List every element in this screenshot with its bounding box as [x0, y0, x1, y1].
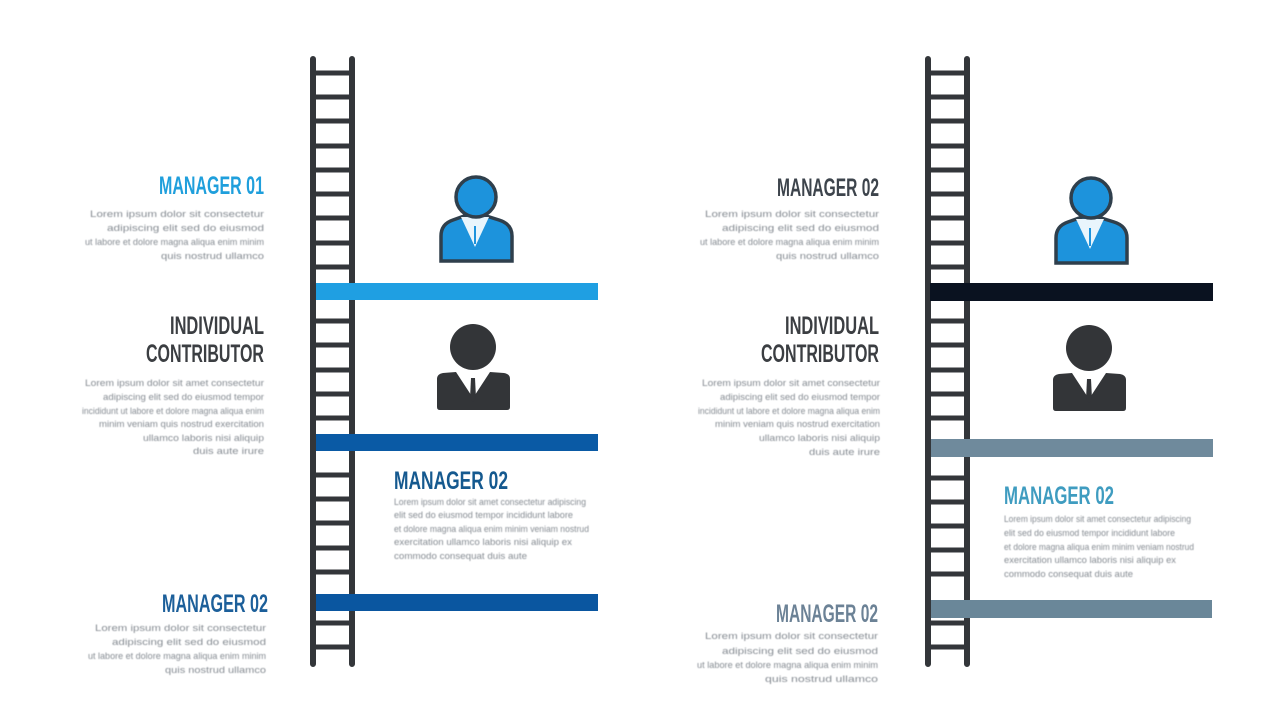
- text: manager 02 centre: et dolore magna aliqua enim minim veniam nostrud: [394, 524, 589, 535]
- text: individual contributor right: duis aute irure: [809, 447, 880, 458]
- bar: dark blue rung: [316, 594, 598, 611]
- text: manager 02 bottom right: Lorem ipsum dolor sit consectetur: [705, 631, 878, 642]
- text: individual contributor: adipiscing elit sed do eiusmod tempor: [103, 392, 264, 403]
- text: individual contributor right: incididunt ut labore et dolore magna aliqua enim: [698, 406, 880, 417]
- bar: light blue rung: [316, 283, 598, 300]
- text: manager 02 centre: commodo consequat duis aute: [394, 551, 527, 562]
- text: manager 02 centre right: MANAGER 02: [1004, 482, 1114, 510]
- text: manager 02 bottom right: adipiscing elit sed do eiusmod: [722, 646, 878, 657]
- panel: left career ladder: [82, 59, 598, 676]
- text: manager 02 centre: Lorem ipsum dolor sit amet consectetur adipiscing: [394, 497, 586, 508]
- text: individual contributor right: minim veniam quis nostrud exercitation: [715, 419, 880, 430]
- text: individual contributor: ullamco laboris nisi aliquip: [143, 433, 264, 444]
- text: manager 01: ut labore et dolore magna aliqua enim minim: [85, 237, 264, 248]
- bar: slate rung upper: [931, 439, 1213, 457]
- text: manager 02 bottom right: ut labore et dolore magna aliqua enim minim: [697, 660, 878, 671]
- text: individual contributor right: CONTRIBUTOR: [761, 340, 879, 368]
- text: manager 02 centre right: exercitation ullamco laboris nisi aliquip ex: [1004, 555, 1176, 566]
- icon: blue manager right: [1056, 178, 1127, 263]
- text: manager 02 top right: MANAGER 02: [777, 174, 879, 202]
- text: individual contributor: Lorem ipsum dolor sit amet consectetur: [85, 378, 264, 389]
- text: manager 01: MANAGER 01: [159, 172, 264, 200]
- panel: right career ladder: [697, 59, 1213, 685]
- text: individual contributor: incididunt ut labore et dolore magna aliqua enim: [82, 406, 264, 417]
- ladder: left: [313, 59, 352, 664]
- text: manager 01: [85, 172, 264, 262]
- text: manager 02 centre right: [1004, 482, 1194, 580]
- icon: dark contributor right: [1053, 325, 1126, 411]
- icon: dark contributor: [437, 324, 510, 410]
- text: manager 02 top right: adipiscing elit sed do eiusmod: [722, 223, 879, 234]
- text: manager 02 centre right: Lorem ipsum dolor sit amet consectetur adipiscing: [1004, 514, 1191, 525]
- text: individual contributor right: [698, 312, 880, 458]
- text: manager 01: Lorem ipsum dolor sit consectetur: [90, 209, 264, 220]
- bar: black rung: [930, 283, 1213, 301]
- text: individual contributor: INDIVIDUAL: [170, 312, 264, 340]
- text: manager 01: adipiscing elit sed do eiusmod: [107, 223, 264, 234]
- text: manager 02 centre: exercitation ullamco laboris nisi aliquip ex: [394, 537, 572, 548]
- text: manager 01: quis nostrud ullamco: [161, 251, 264, 262]
- text: individual contributor right: ullamco laboris nisi aliquip: [759, 433, 880, 444]
- text: individual contributor: minim veniam quis nostrud exercitation: [99, 419, 264, 430]
- text: individual contributor right: adipiscing elit sed do eiusmod tempor: [720, 392, 880, 403]
- text: individual contributor: duis aute irure: [193, 446, 264, 457]
- text: manager 02 bottom: adipiscing elit sed do eiusmod: [112, 637, 266, 648]
- bar: slate rung lower: [931, 600, 1212, 618]
- text: manager 02 bottom: quis nostrud ullamco: [165, 665, 266, 676]
- text: individual contributor: CONTRIBUTOR: [146, 340, 264, 368]
- text: individual contributor: [82, 312, 264, 457]
- icon: blue manager: [441, 177, 512, 261]
- text: manager 02 centre: MANAGER 02: [394, 467, 508, 495]
- text: manager 02 bottom right: MANAGER 02: [776, 600, 878, 628]
- text: manager 02 top right: ut labore et dolore magna aliqua enim minim: [700, 237, 879, 248]
- text: manager 02 centre right: et dolore magna aliqua enim minim veniam nostrud: [1004, 542, 1194, 553]
- text: individual contributor right: INDIVIDUAL: [785, 312, 879, 340]
- text: manager 02 centre: elit sed do eiusmod tempor incididunt labore: [394, 510, 573, 521]
- text: manager 02 centre: [394, 467, 589, 562]
- text: manager 02 top right: [700, 174, 879, 262]
- text: manager 02 top right: quis nostrud ullamco: [776, 251, 879, 262]
- text: manager 02 bottom: ut labore et dolore magna aliqua enim minim: [88, 651, 266, 662]
- text: manager 02 bottom: [88, 590, 268, 676]
- text: manager 02 bottom right: quis nostrud ullamco: [765, 674, 878, 685]
- ladder: right: [928, 59, 967, 664]
- text: manager 02 bottom: MANAGER 02: [162, 590, 268, 618]
- text: manager 02 bottom right: [697, 600, 878, 685]
- text: manager 02 bottom: Lorem ipsum dolor sit consectetur: [95, 623, 266, 634]
- text: manager 02 top right: Lorem ipsum dolor sit consectetur: [705, 209, 879, 220]
- text: individual contributor right: Lorem ipsum dolor sit amet consectetur: [702, 378, 880, 389]
- text: manager 02 centre right: commodo consequat duis aute: [1004, 569, 1133, 580]
- bar: mid blue rung: [316, 434, 598, 451]
- text: manager 02 centre right: elit sed do eiusmod tempor incididunt labore: [1004, 528, 1175, 539]
